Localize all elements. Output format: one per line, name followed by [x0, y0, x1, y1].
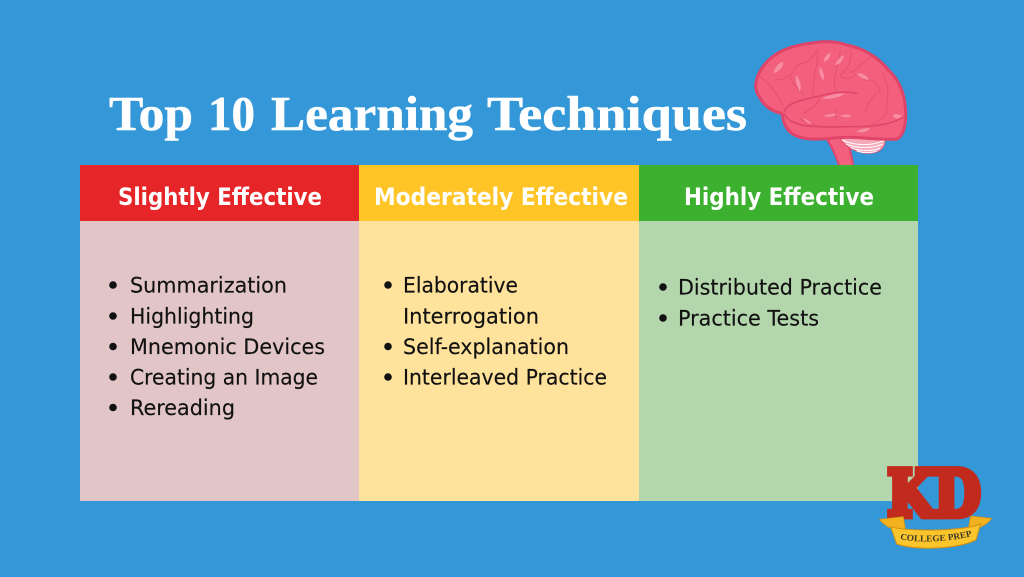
heading: highly effective: Highly Effective [684, 183, 874, 211]
list: moderately effective techniques [384, 274, 607, 390]
list: highly effective techniques: Distributed Practice [678, 276, 882, 300]
logo: KD College Prep: COLLEGE PREP [900, 530, 971, 542]
list: moderately effective techniques: Interleaved Practice [403, 366, 607, 390]
panel: slightly effective [80, 165, 359, 501]
list: slightly effective techniques: Rereading [130, 396, 235, 421]
heading: slightly effective: Slightly Effective [118, 183, 322, 211]
list: moderately effective techniques: Self-explanation [403, 335, 569, 360]
icon: brain [756, 42, 906, 167]
heading: moderately effective: Moderately Effective [374, 183, 628, 211]
title: 10 [208, 86, 255, 141]
list: slightly effective techniques: Highlighting [130, 304, 254, 330]
list: highly effective techniques [659, 276, 882, 332]
title: Top [109, 86, 193, 141]
logo: KD College Prep: KD [887, 457, 981, 532]
list: slightly effective techniques: Mnemonic Devices [130, 335, 325, 360]
list: moderately effective techniques: Elaborative [403, 274, 518, 298]
panel: moderately effective [359, 165, 639, 501]
table [80, 165, 918, 501]
panel: highly effective [639, 165, 918, 501]
title: Techniques [487, 86, 747, 141]
list: slightly effective techniques: Creating an Image [130, 366, 318, 390]
title [109, 86, 747, 141]
list: slightly effective techniques [109, 274, 325, 421]
list: highly effective techniques: Practice Tests [678, 306, 819, 332]
list: moderately effective techniques: Interrogation [403, 304, 539, 330]
title: Learning [271, 86, 474, 141]
list: slightly effective techniques: Summarization [130, 274, 287, 298]
